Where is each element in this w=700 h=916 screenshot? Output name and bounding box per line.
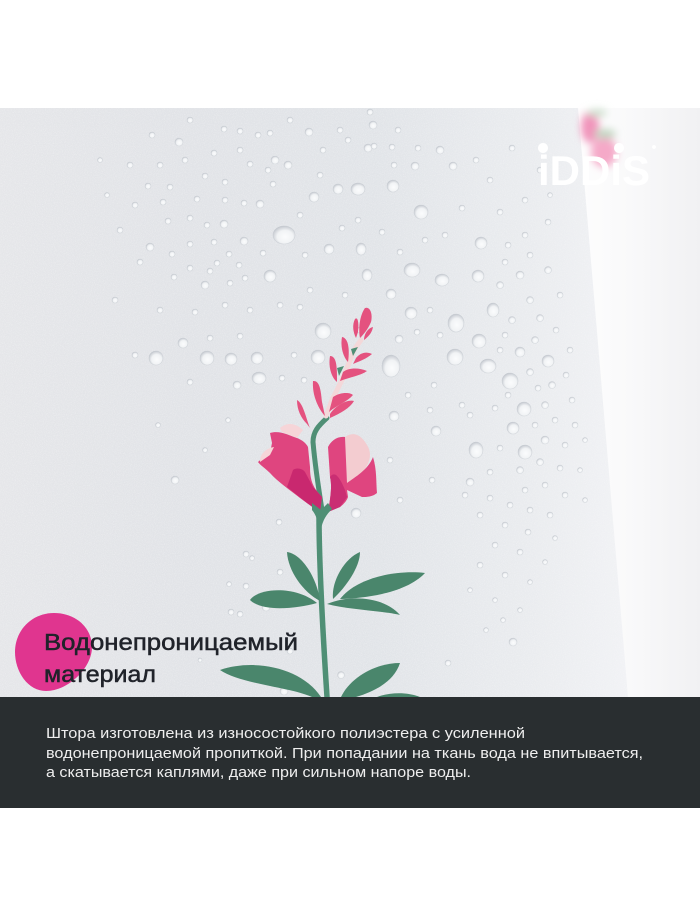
flower: calyx [312,503,332,529]
heading [44,629,298,687]
large drops [273,226,295,244]
water drops [98,109,588,695]
flower: pale petal tips [260,424,303,462]
backdrop behind curtain [560,108,700,697]
description text [46,725,643,781]
flower: bud pale stems [326,340,361,416]
flower: upper buds [297,308,373,428]
small drops top area [175,138,183,146]
heading: материал [44,661,156,687]
description text: водонепроницаемой пропиткой. При попадании на ткань вода не впитывается, [46,745,643,762]
blurred flower behind the curtain [581,109,617,167]
small drops bottom [243,551,249,557]
description text: Штора изготовлена из износостойкого полиэстера с усиленной [46,725,525,742]
logo: i dots and registered mark [538,143,656,153]
flower: left petal shade [287,469,322,512]
photo: curtain with water drops [0,108,700,697]
heading accent: pink blob [15,613,92,691]
flower: right pale petal [345,434,370,485]
flower: large right petal [328,437,377,512]
flower: bud green details [337,347,358,376]
flower: large left petal [258,432,322,512]
panel: description [0,697,700,808]
flower: stems [313,418,327,697]
logo: IDDIS: iDDiS [538,147,650,194]
flower: right petal shade [328,474,347,512]
description text: а скатывается каплями, даже при сильном напоре воды. [46,764,471,781]
heading: Водонепроницаемый [44,629,298,655]
curtain fabric [0,108,628,697]
fabric grain [4,110,470,696]
small drops middle [178,338,188,348]
small drops right cluster [496,282,504,288]
leaves [220,552,425,697]
